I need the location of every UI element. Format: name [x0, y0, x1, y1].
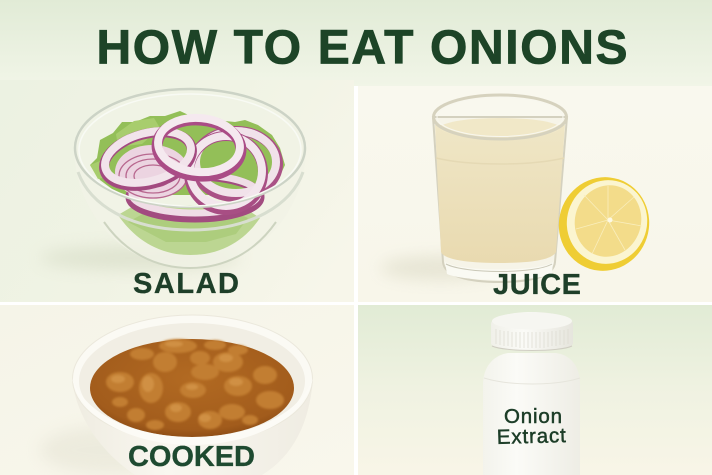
panel: extract: [358, 305, 712, 475]
icon: lemon half: [547, 165, 661, 283]
bottle label text: Extract: [497, 424, 566, 449]
bottle label text: Onion: [504, 405, 562, 428]
label: salad: SALAD: [133, 268, 239, 300]
icon: white bowl of cooked onions: [40, 315, 313, 475]
title: HOW TO EAT ONIONS: [96, 22, 628, 74]
label: juice: JUICE: [493, 269, 581, 301]
panel: cooked: [0, 305, 354, 475]
bottle label text: [497, 405, 566, 449]
icon: glass of onion juice: [380, 95, 567, 282]
icon: glass bowl with lettuce and red onion rings: [40, 89, 306, 270]
background: title band: [0, 0, 712, 86]
label: cooked: COOKED: [128, 441, 255, 473]
icon: onion extract bottle: [483, 312, 580, 475]
panel: salad: [0, 80, 354, 302]
panel: juice: [358, 86, 712, 302]
